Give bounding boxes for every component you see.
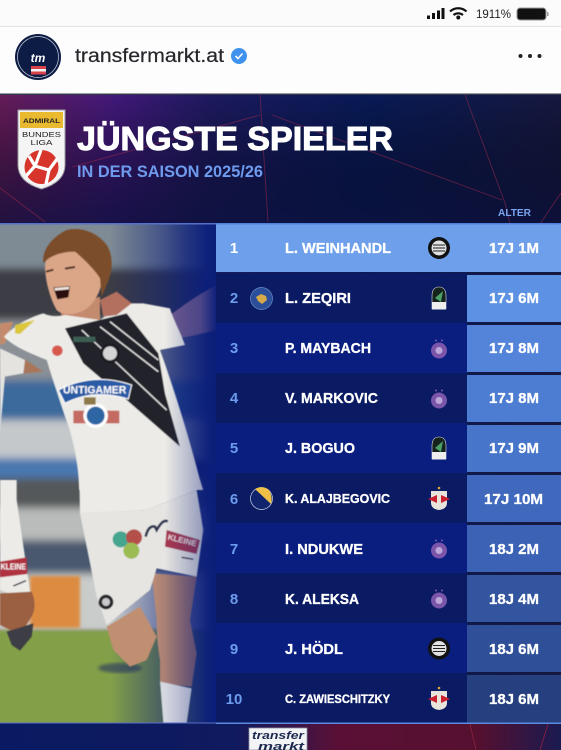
teammate leg: [0, 592, 35, 635]
row 2: 2: [230, 290, 238, 307]
shirt crest: [73, 397, 119, 428]
row 1: 17J 1M: [489, 240, 539, 257]
lower body: [0, 480, 203, 723]
club crest on shirt: [100, 346, 118, 363]
photo background: [0, 224, 206, 632]
row 9: 18J 6M: [489, 641, 539, 658]
player fade into table: [165, 200, 216, 740]
icon: Ried crest: [432, 287, 446, 310]
league patch: [52, 345, 63, 356]
row 5: 5: [230, 440, 238, 457]
row 1: 1: [230, 240, 238, 257]
icon: Salzburg crest: [428, 687, 450, 710]
row 3: P. MAYBACH: [285, 340, 371, 357]
eyes: [46, 267, 75, 272]
logo text: Bundes: BUNDES: [22, 130, 61, 139]
background fade into table: [114, 224, 216, 722]
near leg: [152, 573, 197, 687]
icon: signal: [427, 8, 444, 19]
neck: [60, 296, 101, 321]
row 2: [216, 273, 561, 323]
shorts sponsor: [165, 530, 200, 554]
column header: Alter: ALTER: [498, 207, 531, 219]
shirt: [4, 303, 203, 490]
row 7: [216, 523, 561, 573]
teammate torso: [0, 348, 25, 433]
footer strip: [0, 722, 561, 750]
logo ball: [24, 150, 58, 184]
row 5: [216, 423, 561, 473]
league logo: [18, 110, 65, 189]
row 3: 17J 8M: [489, 340, 539, 357]
icon: verified badge: [231, 48, 247, 64]
orange board: [30, 576, 80, 628]
row 10: C. ZAWIESCHITZKY: [285, 694, 390, 706]
icon: Bosnia flag: [250, 487, 272, 510]
row 3: [216, 323, 561, 373]
shadow on grass: [98, 663, 142, 673]
icon: Austria crest: [431, 590, 447, 608]
row 6: 6: [230, 491, 238, 508]
row 2: L. ZEQIRI: [285, 290, 351, 307]
far thigh: [107, 607, 157, 667]
hair: [43, 229, 112, 297]
battery percent: 1911%: [476, 9, 511, 21]
logo text: Admiral: ADMIRAL: [23, 118, 60, 125]
teammate shoe: [7, 623, 33, 651]
icon: Sturm crest: [428, 638, 450, 660]
row 5: 17J 9M: [489, 440, 539, 457]
avatar: tm logo: [15, 34, 61, 80]
photo top rule: [0, 223, 216, 224]
row 6: K. ALAJBEGOVIC: [285, 491, 391, 506]
grass: [0, 628, 204, 722]
icon: Kosovo flag: [250, 288, 272, 310]
transfermarkt logo: transfer: [252, 730, 305, 742]
row 10: [216, 673, 561, 723]
upper body: [0, 229, 217, 490]
row 5: J. BOGUO: [285, 440, 355, 457]
logo text: Liga: LIGA: [30, 138, 52, 147]
row 9: J. HÖDL: [285, 641, 343, 658]
teammate arm: [0, 322, 13, 345]
row 1: L. WEINHANDL: [285, 240, 391, 257]
icon: Sturm crest: [428, 237, 450, 259]
shirt sash: [65, 313, 180, 447]
red rays: [0, 95, 561, 224]
teammate forearm: [23, 358, 43, 373]
ranking table: [216, 223, 561, 723]
row 9: [216, 623, 561, 673]
sponsor circles: [113, 529, 142, 559]
icon: more menu: [518, 54, 542, 58]
hand on neck: [100, 292, 132, 317]
sleeve patch: [15, 320, 35, 334]
title: JÜNGSTE SPIELER: [77, 120, 393, 157]
row 7: 18J 2M: [489, 541, 539, 558]
row 7: I. NDUKWE: [285, 541, 363, 558]
row 4: 4: [230, 390, 239, 407]
collar sponsor: [73, 337, 95, 342]
row 8: 8: [230, 591, 238, 608]
sponsor band: [58, 379, 132, 403]
ear: [93, 271, 103, 288]
row 10: 10: [226, 691, 242, 708]
icon: battery: [517, 8, 548, 20]
row 6: 17J 10M: [484, 491, 543, 508]
teammate shorts: [0, 500, 30, 595]
row 10: 18J 6M: [489, 691, 539, 708]
avatar: tm logo: tm: [31, 51, 46, 65]
row 9: 9: [230, 641, 238, 658]
row 8: [216, 573, 561, 623]
shirt hem: [79, 480, 200, 513]
sock: [160, 682, 192, 723]
row 8: 18J 4M: [489, 591, 539, 608]
shorts: [80, 490, 203, 625]
shorts logo: [146, 521, 168, 537]
shorts sponsor text: KLEINE: [167, 533, 198, 549]
row 6: [216, 473, 561, 523]
icon: Austria crest: [431, 390, 447, 408]
icon: Salzburg crest: [428, 487, 450, 510]
row 4: [216, 373, 561, 423]
player photo: [0, 224, 216, 722]
shirt sponsor: UNTIGAMER: [63, 384, 127, 396]
row 3: 3: [230, 340, 238, 357]
icon: Austria crest: [431, 340, 447, 358]
row 1: [216, 223, 561, 272]
shorts crest: [99, 595, 113, 609]
status bar: [0, 0, 561, 27]
raised arm: [168, 285, 217, 338]
teammate sponsor: [0, 557, 27, 577]
row 7: 7: [230, 541, 238, 558]
account name: transfermarkt.at: [75, 46, 225, 67]
swooshes: [13, 557, 193, 586]
subtitle: IN DER SAISON 2025/26: [77, 162, 263, 181]
row 8: K. ALEKSA: [285, 591, 359, 608]
icon: wifi: [450, 8, 466, 18]
mouth: [53, 286, 70, 299]
row 4: V. MARKOVIC: [285, 390, 378, 407]
icon: Austria crest: [431, 540, 447, 558]
row 2: 17J 6M: [489, 290, 539, 307]
teammate shirt hem: [0, 480, 17, 503]
face: [45, 248, 102, 314]
row 4: 17J 8M: [489, 390, 539, 407]
post header: [0, 27, 561, 95]
icon: Ried crest: [432, 437, 446, 460]
teammate sponsor text: KLEINE: [1, 562, 27, 571]
transfermarkt logo: [249, 728, 307, 750]
